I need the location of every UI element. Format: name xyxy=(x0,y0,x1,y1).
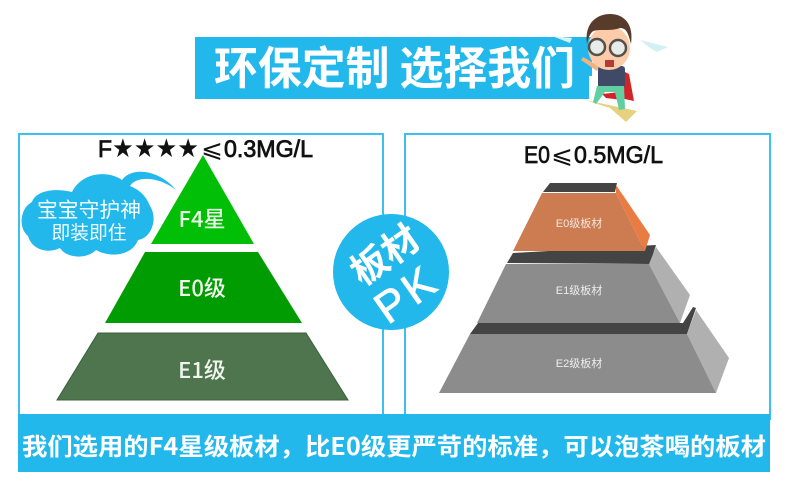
heading: F4 limit: ★★★★ xyxy=(112,134,199,164)
pyramid tier: E1 board: E1级板材 xyxy=(556,283,602,297)
heading: F4 limit: F xyxy=(98,136,112,163)
heading: E0 limit: E0 xyxy=(524,142,550,169)
pyramid tier: E2 board xyxy=(439,307,729,393)
heading: E0 limit: 0.5MG/L xyxy=(574,142,663,169)
pyramid tier: E0: E0级 xyxy=(178,271,226,303)
callout: cloud bubble: 宝宝守护神 xyxy=(37,193,141,223)
callout: cloud bubble: 即装即住 xyxy=(52,218,126,245)
pyramid tier: E0 board xyxy=(513,183,650,251)
pyramid tier: E1 board xyxy=(477,245,690,323)
heading: F4 limit: 0.3MG/L xyxy=(224,136,313,163)
pyramid tier: E0 board: E0级板材 xyxy=(556,216,602,230)
pyramid tier: E2 board: E2级板材 xyxy=(556,356,602,370)
badge: board PK xyxy=(333,209,449,333)
pyramid tier: E1 xyxy=(57,333,348,400)
heading: E0 limit: ⩽ xyxy=(551,141,573,169)
badge: board PK: PK xyxy=(365,255,448,333)
panel: F4 star pyramid xyxy=(19,134,383,419)
title banner: 环保定制 选择我们 xyxy=(214,32,575,97)
heading: E0 limit xyxy=(524,141,663,169)
badge: board PK: 板材 xyxy=(337,209,429,296)
bottom caption bar: 我们选用的F4星级板材，比E0级更严苛的标准，可以泡茶喝的板材 xyxy=(22,427,766,462)
icon: cartoon superhero character xyxy=(552,14,668,122)
heading: F4 limit: ⩽ xyxy=(201,135,223,163)
pyramid tier: E1: E1级 xyxy=(178,353,226,385)
pyramid tier: F4: F4星 xyxy=(178,202,226,234)
heading: F4 limit xyxy=(98,134,313,164)
callout: cloud bubble xyxy=(22,172,176,257)
panel: E0 limit pyramid xyxy=(405,134,770,419)
bottom caption bar xyxy=(18,414,770,472)
pyramid tier: F4 xyxy=(151,155,254,244)
pyramid tier: E0 xyxy=(105,252,302,323)
